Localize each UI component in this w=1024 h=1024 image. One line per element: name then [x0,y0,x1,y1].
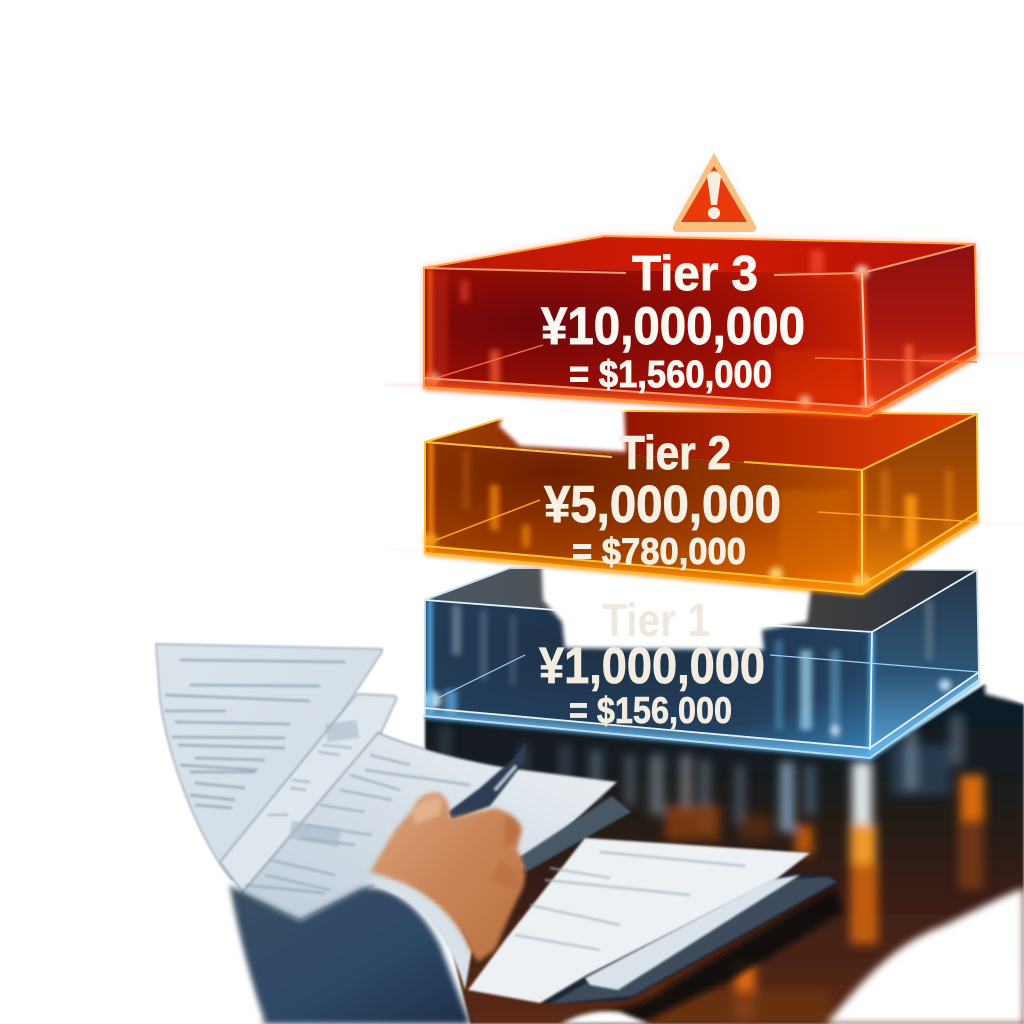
paper: back sheet [156,644,382,880]
folder under held sheet [518,796,631,872]
paper: main held sheet [240,733,617,920]
tier 1 label: ¥1,000,000 [539,637,765,694]
table reflections [440,715,984,1024]
tier 3 label: Tier 3 [632,247,758,301]
tier 2 box [423,410,978,594]
tier 2 label: ¥5,000,000 [544,476,781,534]
tier 1 label: Tier 1 [602,594,710,646]
paper: second sheet [220,694,396,895]
soft white mask: bottom of table [560,1011,650,1024]
glow flares beside the boxes [385,353,1024,551]
white fade: bottom-right of table [826,888,1024,1024]
tier 3 box [424,236,977,416]
dark shadow under folder [560,888,842,1024]
tier 3 label: = $1,560,000 [569,354,772,396]
tier 2 label [544,426,781,572]
tier 1 inner glow streaks [423,600,951,740]
panel: reflective table [425,684,1024,1024]
soft white mask: left of suit [150,770,265,1024]
hand [370,793,525,962]
white fade: upper-right of table [985,672,1024,704]
tier 2 bottom band [425,512,978,594]
suit sleeve [228,885,470,1024]
tier 2 label: = $780,000 [572,531,746,572]
tier 2 inner glow streaks [423,450,953,590]
tier 1 bottom band [425,672,979,758]
tier 3 glowing edges [424,268,977,416]
tier 1 glowing edges [425,600,979,758]
tier 3 label: ¥10,000,000 [541,297,805,356]
tier 1 label: = $156,000 [569,690,732,731]
tier 3 inner glow streaks [425,250,960,412]
shirt cuff [366,879,472,990]
tier 3 bottom band [424,346,977,416]
tier 1 label [539,594,765,731]
tier 1 box [423,568,979,758]
tier 2 label: Tier 2 [619,426,731,479]
tier 2 glowing edges [425,442,978,594]
white blotch over tier 1 [541,556,812,650]
white blotch over tier 2 [499,404,626,452]
lower sheets and folder [468,838,838,1004]
pen [448,742,526,820]
documents and hand scene [156,644,842,1024]
warning triangle icon [673,153,756,232]
tier 3 label [541,247,805,396]
